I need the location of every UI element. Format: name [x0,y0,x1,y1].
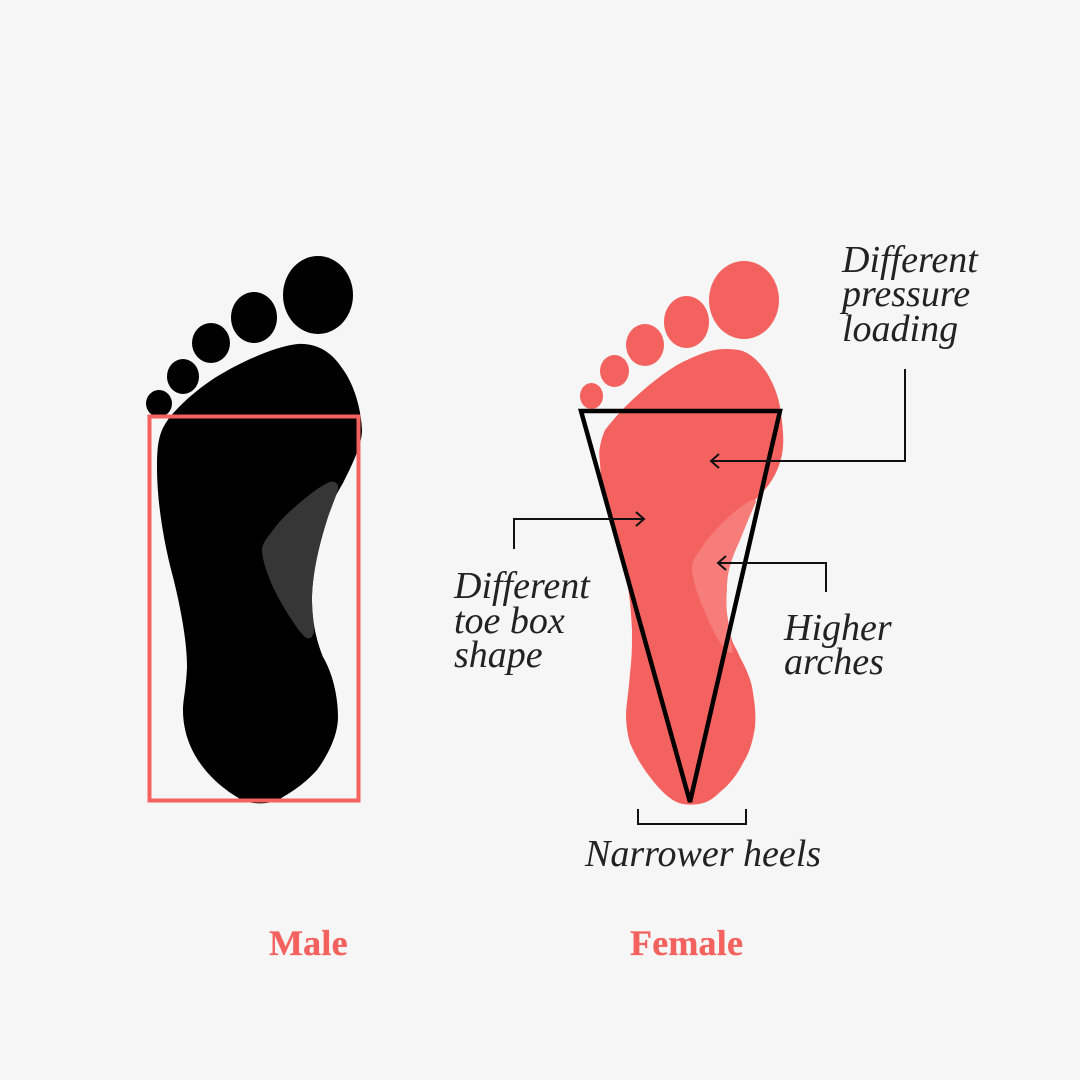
female arch highlight [692,500,756,653]
callout: different pressure loading: Different [841,239,979,281]
callout: higher arches: Higher [783,607,892,649]
male foot [146,256,362,803]
callout: different pressure loading: loading [842,308,958,350]
callout: different toe box shape: Different [453,565,591,607]
male toes [146,256,353,417]
callout: narrower heels: Narrower heels [584,833,821,875]
female sole [599,349,783,805]
callout: different pressure loading [711,239,979,468]
male sole [157,344,362,803]
callout: different toe box shape [453,512,644,676]
bracket [638,809,746,824]
label: male: Male [269,923,348,963]
callout: higher arches: arches [784,641,884,683]
callout: different toe box shape: toe box [454,600,565,642]
arrow: arches [718,556,826,592]
arrow: toe box [514,512,644,549]
callout: different pressure loading: pressure [839,273,970,315]
callout: different toe box shape: shape [454,634,543,676]
label: female: Female [630,923,743,963]
male rectangle outline [150,416,358,800]
callout: higher arches [718,556,892,683]
arrow: pressure [711,369,905,468]
female foot [580,261,783,805]
female triangle outline [581,411,780,802]
female toes [580,261,779,409]
callout: narrower heels [584,809,821,875]
male arch highlight [262,482,338,638]
